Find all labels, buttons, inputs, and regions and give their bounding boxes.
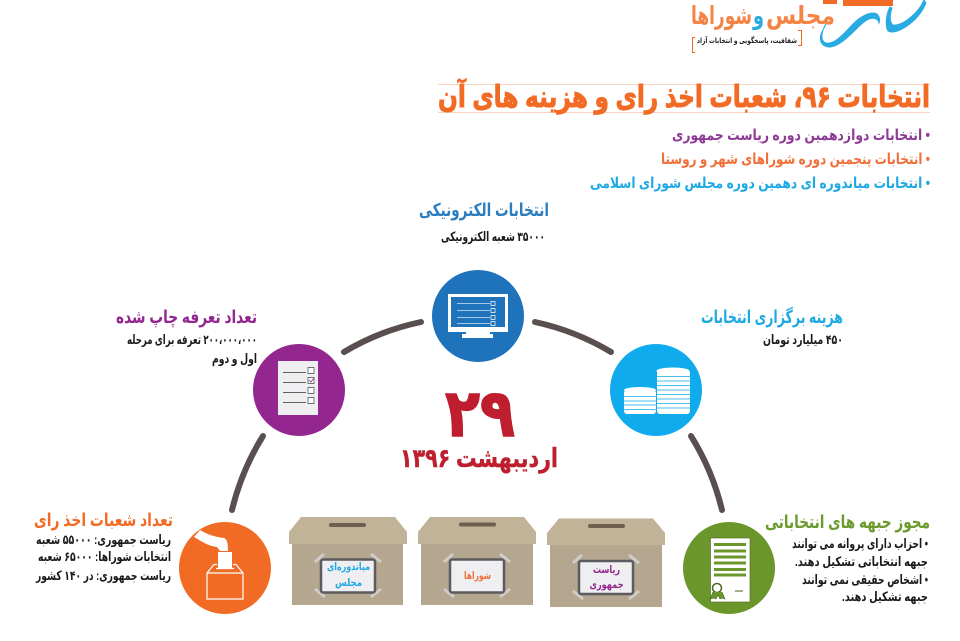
logo	[691, 0, 926, 52]
date text: اردیبهشت ۱۳۹۶	[400, 443, 558, 474]
logo name: شوراها	[691, 2, 752, 31]
box label	[590, 564, 624, 591]
logo slogan: شفافیت، پاسخگویی و انتخابات آزاد	[697, 35, 797, 45]
logo name	[691, 2, 835, 31]
body: ۳۵۰۰۰ شعبه الکترونیکی	[441, 229, 545, 244]
heading: تعداد تعرفه چاپ شده	[116, 307, 257, 328]
connecting arcs	[232, 322, 722, 510]
body: ریاست جمهوری: ۵۵۰۰۰ شعبه	[36, 532, 171, 547]
electoral fronts block: جبهه تشکیل دهند.	[842, 589, 928, 604]
logo top bar	[823, 0, 893, 6]
logo name: و	[752, 2, 764, 31]
heading: تعداد شعبات اخذ رای	[34, 510, 173, 530]
electoral fronts block	[683, 512, 930, 614]
box label: میاندوره‌ای	[327, 561, 370, 573]
central date	[400, 376, 558, 474]
title: انتخابات ۹۶، شعبات اخذ رای و هزینه های آن	[438, 78, 930, 115]
body: ۴۵۰ میلیارد تومان	[763, 332, 843, 347]
box label	[327, 561, 370, 589]
box label: مجلس	[335, 577, 362, 589]
cost block	[610, 306, 843, 436]
logo brackets	[692, 30, 802, 52]
icon: monitor	[432, 270, 524, 362]
box label: ریاست	[593, 564, 620, 576]
ballot papers block: اول و دوم	[212, 351, 257, 367]
election list	[590, 127, 930, 192]
parliament ballot box	[289, 517, 407, 605]
icon: ballot box and hand	[179, 522, 271, 614]
box label: جمهوری	[590, 579, 624, 591]
presidential ballot box	[547, 518, 665, 607]
box label: شوراها	[464, 570, 491, 582]
polling stations block	[34, 510, 271, 614]
body: ۲۰۰،۰۰۰،۰۰۰ تعرفه برای مرحله	[127, 332, 257, 347]
logo name: مجلس	[766, 2, 835, 30]
icon: ballot checklist	[253, 344, 345, 436]
heading: هزینه برگزاری انتخابات	[701, 306, 843, 328]
ballot papers block	[116, 307, 345, 436]
logo swoosh	[820, 0, 926, 47]
heading: انتخابات الکترونیکی	[419, 200, 549, 221]
electronic election block	[419, 200, 549, 362]
icon: coin stacks	[610, 344, 702, 436]
polling stations block: انتخابات شوراها: ۶۵۰۰۰ شعبه	[38, 549, 171, 564]
icon: licence certificate	[683, 522, 775, 614]
councils ballot box	[418, 517, 536, 605]
date number: ۲۹	[445, 376, 515, 450]
polling stations block: ریاست جمهوری: در ۱۴۰ کشور	[35, 568, 171, 583]
